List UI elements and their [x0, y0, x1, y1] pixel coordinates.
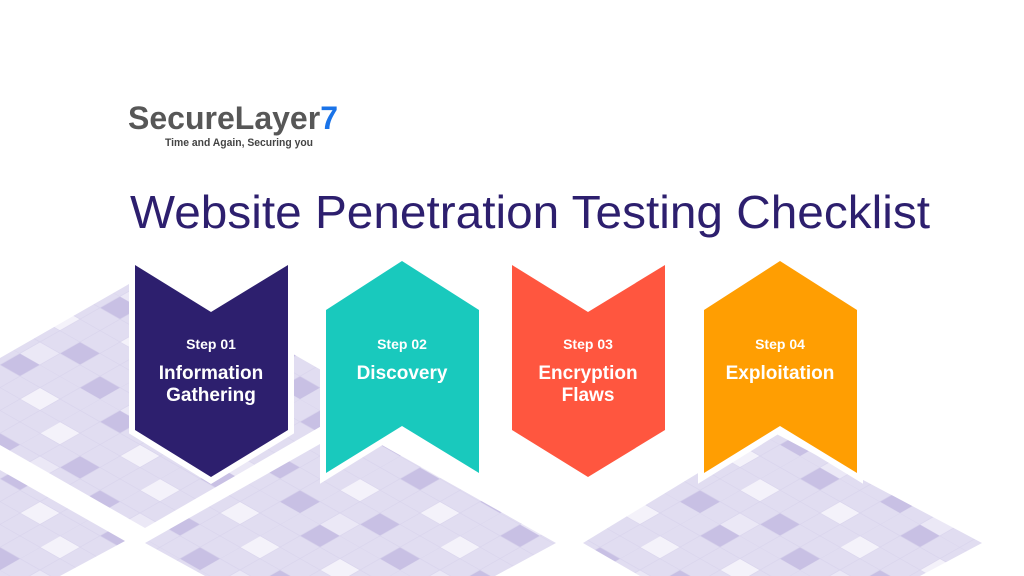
- step 1: Gathering: [166, 385, 256, 406]
- step 3: Encryption: [538, 363, 638, 384]
- step 4: Step 04: [755, 336, 805, 352]
- step 2: Step 02: [377, 336, 427, 352]
- tagline: Time and Again, Securing you: [165, 137, 313, 149]
- step 3: Step 03: [563, 336, 613, 352]
- step 1: Information: [159, 363, 263, 384]
- step 1: Step 01: [186, 336, 236, 352]
- step 4: Exploitation: [726, 363, 834, 384]
- step 3: [512, 265, 665, 477]
- step 3: Flaws: [562, 385, 614, 406]
- background lattice: [0, 272, 982, 576]
- step 4: [704, 261, 857, 473]
- logo: SecureLayer7: [128, 100, 338, 136]
- title: Website Penetration Testing Checklist: [130, 186, 930, 238]
- step 1: [135, 265, 288, 477]
- step 2: Discovery: [357, 363, 448, 384]
- step 2: [326, 261, 479, 473]
